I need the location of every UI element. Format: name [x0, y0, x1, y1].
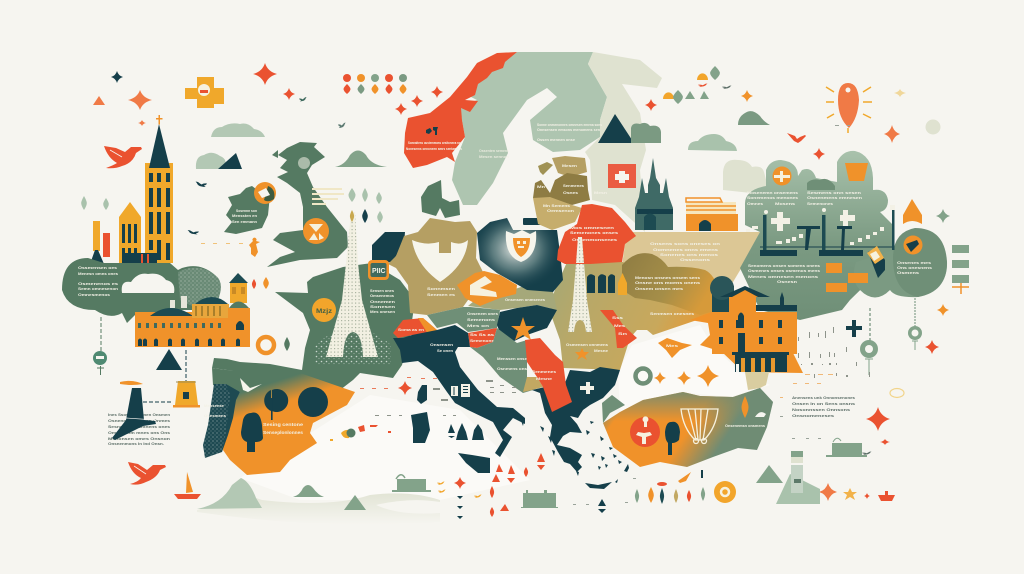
spain text [263, 422, 304, 435]
russia text lower: Osmenes onses osmenos mens [748, 269, 820, 273]
russia text lower [748, 264, 820, 284]
switzerland text: Soma as en [398, 328, 425, 332]
russia text top: Osnenmens emnesen [807, 196, 863, 200]
moldova text: Sss [612, 316, 623, 320]
country: great britain [267, 142, 348, 267]
leaves: near britain [81, 188, 383, 351]
country: lithuania [533, 197, 582, 230]
text block: bottom left: Osnenm Omenssn Onmes [108, 419, 170, 423]
portugal text: Mensense [204, 404, 224, 408]
map: british isles [224, 142, 348, 267]
badge: benelux [368, 260, 389, 280]
badge: ireland north [254, 182, 276, 204]
badge: right [904, 236, 922, 254]
map: north africa coast strip [197, 478, 440, 524]
spain icons [240, 378, 328, 452]
country: russia south coast orange [690, 312, 803, 373]
turkey text: Onsenemsn onsmens [725, 424, 765, 428]
small figure [249, 238, 260, 257]
dashed connector [143, 401, 172, 403]
country: greek thrace [602, 395, 625, 423]
country: tan coast [523, 377, 543, 392]
belarus text: Mos omnesnen [570, 226, 615, 230]
italy sign [451, 384, 470, 397]
serbia text [532, 370, 556, 381]
country: ireland [224, 186, 270, 234]
dash pins right [860, 298, 922, 375]
island: sicily [458, 453, 490, 473]
chimney bars [93, 221, 100, 251]
map: balkans [470, 237, 637, 489]
baltics text: Oemsenon [547, 209, 575, 213]
ring: pale right [890, 388, 904, 398]
country: crimea [658, 338, 692, 358]
badge: france [312, 298, 336, 322]
poland port block [523, 218, 550, 225]
baltics text: Mesn [594, 191, 608, 195]
finland text [537, 123, 602, 142]
region: dark bushes [710, 276, 734, 312]
country: bulgaria and greece [532, 367, 620, 472]
hills: bottom left [293, 485, 366, 510]
connector: left cloud pin [93, 317, 107, 375]
statues [170, 296, 187, 308]
ukraine cream text: Sonenes ons menos [660, 253, 718, 257]
slovenia text: Semenons [470, 339, 494, 343]
dark circle [298, 387, 328, 417]
country: ukraine cream [622, 232, 760, 320]
badge: england [303, 218, 329, 244]
text block: east sea: Onsnomeneses [792, 414, 834, 418]
shield: poland [506, 230, 536, 262]
norway text: Nonesmns onnoneen amrs sentamens [406, 147, 462, 151]
text block: east sea: Onsen In on Sens onsns [792, 402, 855, 406]
map: scandinavia [404, 52, 662, 232]
germany text: Sonnmsen [427, 287, 456, 291]
cloud text [78, 266, 119, 297]
dashes: mediterranean [330, 377, 456, 441]
map: baltic states and belarus [533, 156, 738, 264]
moldova text [612, 316, 628, 336]
france text: Sonesen [370, 305, 396, 309]
sparkles: red and orange markers [93, 63, 950, 501]
badge: cross [772, 166, 792, 186]
country: tan plain [550, 262, 715, 370]
colonnade [192, 304, 229, 318]
spire [149, 124, 170, 168]
icon: gear [714, 481, 736, 503]
baltics text: Mesen [562, 164, 578, 168]
country: czechia [457, 271, 517, 306]
island [272, 150, 278, 158]
moldova text: Sn [618, 332, 628, 336]
russia text top: Sonemenos menones [747, 196, 798, 200]
croatia text: Menssen onse [497, 357, 527, 361]
finland text: Ossen mennen onse [537, 138, 575, 142]
dashes: south [573, 125, 850, 505]
belarus text [570, 226, 618, 242]
aegean islands [520, 418, 629, 483]
russia text top: Mosens [775, 202, 795, 206]
eiffel tower: france [326, 212, 378, 357]
cloud text: Semn omnesenon [78, 287, 119, 291]
dark cloud bumps [807, 179, 835, 190]
text block: east sea [792, 396, 855, 418]
icon: white bump [755, 412, 766, 417]
ukraine brown text: Onsem onsen mes [635, 287, 683, 291]
croatia text [497, 357, 527, 371]
right cloud text [897, 261, 932, 275]
baltics text: Osnes [563, 191, 578, 195]
italy text [430, 343, 454, 353]
small birds [188, 84, 872, 455]
cloud [631, 123, 661, 143]
badge: red [630, 416, 660, 447]
icon: czech [470, 276, 497, 297]
circle: pale top right [926, 120, 940, 134]
spain text: Senseplonlonnes [263, 430, 304, 435]
plus: orange top [185, 77, 224, 108]
eiffel tower: romania [568, 237, 592, 332]
country: portugal [203, 384, 240, 458]
text block: bottom left: Ines Ssosnn Onsnen Onsmen [108, 413, 171, 417]
star: hungary [511, 317, 535, 340]
island: sardinia [411, 412, 430, 443]
cloud: mid left [196, 153, 226, 169]
icon: shield fan [681, 409, 718, 444]
austria text: Semenons [467, 318, 495, 322]
text block: bottom left: Sesnonm Oesmnens ones [108, 425, 170, 429]
right cloud text: Onsenes mes [897, 261, 931, 265]
map: western europe [203, 180, 487, 475]
bridge: skyline [746, 205, 895, 256]
towers [587, 274, 615, 293]
leaves: bottom row [635, 470, 705, 504]
country: estonia [552, 156, 587, 177]
cloud text: Osmenenos es [78, 282, 118, 286]
country: spain [212, 368, 355, 475]
slovakia text: Onsmsen onmsenes [505, 298, 545, 302]
ring: black sea [636, 368, 650, 384]
panel: green left cloud [62, 258, 221, 323]
country: denmark [421, 180, 460, 218]
norway marks [426, 127, 438, 135]
france text [370, 289, 396, 314]
trees: italy south [448, 423, 484, 440]
sweden text: Mesen sennon [479, 155, 510, 159]
norway text [406, 141, 462, 151]
building: palace left [135, 273, 250, 347]
bird: winged red [787, 133, 806, 143]
mountain: below palace [156, 349, 182, 370]
dash rows: east sea [780, 374, 833, 398]
baltics text: Mn Semens [543, 204, 570, 208]
mountain [218, 153, 242, 169]
russia text lower: Senomens onsen somens onens [748, 264, 820, 268]
island: corsica [417, 385, 427, 404]
cloud: top left [211, 123, 265, 137]
austria text: Mes on [467, 324, 490, 328]
moldova text: Mes [614, 324, 625, 328]
italy text: Onsensen [430, 343, 454, 347]
pin [908, 326, 922, 340]
scotland speckle [298, 157, 310, 169]
ireland text: Menssten en [232, 214, 258, 218]
norway text: Sonnaitens oustemmans cesitoneea nos [408, 141, 462, 145]
flag: switzerland [608, 164, 636, 188]
slovenia text: Ss Ss as [470, 333, 494, 337]
russia text top: Mosenemn onsemens [747, 191, 798, 195]
text block: bottom left [108, 413, 171, 446]
tower windows [149, 173, 170, 260]
uk text bars [312, 188, 344, 205]
russia text top: Omnes [747, 202, 763, 206]
cloud: far right [893, 228, 947, 297]
belarus text: Osnenmonsenes [572, 238, 617, 242]
monument [618, 273, 627, 295]
baltics text: Senmenes [563, 184, 584, 188]
map: turkey [603, 388, 773, 467]
tower [145, 163, 173, 263]
badge: france: Mzjz [316, 309, 332, 315]
sweden text: Ossenten semens [479, 149, 509, 153]
bird: spain [240, 378, 262, 392]
portugal text: Osesmens [204, 414, 226, 418]
mountain [598, 114, 634, 143]
building: cathedral [90, 115, 173, 264]
country: belarus [557, 204, 636, 264]
map: ukraine [550, 232, 803, 390]
right cloud text: Osmens [897, 271, 919, 275]
ukraine cream text: Ossenons [680, 258, 710, 262]
dome [150, 308, 193, 316]
ireland text: Sen emmann [232, 220, 258, 224]
country: hungary [497, 305, 557, 343]
country: norway [404, 52, 517, 168]
tower [230, 283, 247, 303]
sea: pale basins [240, 325, 770, 500]
country: italy [393, 325, 525, 457]
eiffel tower top: belarus [576, 237, 584, 263]
text block: bottom left: Omnesenm mnes ons Ons [108, 431, 170, 435]
windows [138, 323, 221, 328]
cloud: main body [740, 151, 893, 320]
dots: top row [343, 74, 407, 94]
dot grid: east sea [798, 327, 870, 378]
russia text top [747, 191, 863, 206]
cloud text: Omnesmenos [78, 293, 110, 297]
ukraine cream text [650, 242, 721, 262]
connector [869, 308, 871, 345]
stripes: right tags [952, 245, 969, 294]
germany text [427, 287, 456, 297]
castle: bottom [521, 490, 558, 508]
map: russia east [723, 151, 947, 320]
country: switzerland [393, 318, 437, 338]
cross: bulgaria [580, 382, 594, 394]
germany text: Senmen es [427, 293, 455, 297]
dark base [122, 253, 157, 264]
ukraine brown text: Onsne ons moens onens [635, 281, 700, 285]
ireland text: Sosennn son [236, 209, 258, 213]
map: italy and islands [393, 325, 525, 473]
markers: south mediterranean [437, 453, 606, 519]
romania text: Mesne [594, 349, 608, 353]
belarus text: Semenones onses [570, 231, 618, 235]
finland text: Onnsensen emsons menomens sen [537, 128, 601, 132]
ukraine cream text: Oomnenes onns emens [653, 248, 718, 252]
region: cream strait [745, 372, 769, 390]
italy text: Se onen [437, 349, 454, 353]
russia text top: Semenones [807, 202, 833, 206]
icons: top right row [663, 66, 720, 104]
plus: dark [846, 320, 862, 337]
france text: Sensen ones [370, 289, 394, 293]
tree [241, 412, 263, 452]
portugal text [204, 404, 226, 418]
pin [860, 340, 878, 358]
slovenia text [470, 333, 494, 343]
dashes: adriatic [433, 380, 516, 401]
ukraine cream text: Onsens sons oneses on [650, 242, 721, 246]
cloud: dome [335, 150, 387, 167]
baltics text [537, 164, 608, 213]
star: romania [575, 348, 589, 360]
dotted halo: france [315, 328, 391, 365]
text block: east sea: Anensens unk Onnonsenones [792, 396, 855, 400]
france text: Mes onesen [370, 310, 396, 314]
building: palace east [712, 286, 797, 372]
romania text [566, 343, 608, 353]
cathedral: east [635, 158, 673, 230]
building: arcade east [686, 198, 738, 231]
cloud: pale [723, 160, 770, 195]
russia text lower: Osnesn [777, 280, 798, 284]
island: crete [585, 482, 612, 489]
country: germany [388, 218, 487, 315]
country: croatia bosnia [470, 328, 533, 393]
russia text lower: Menes omnesen menons [748, 275, 818, 279]
cloud: small dark [738, 111, 770, 125]
country: ukraine brown blob [622, 253, 718, 315]
tree [272, 389, 288, 412]
text block: east sea: Nosonnssen Onnsons [792, 408, 850, 412]
anchor block left [392, 475, 431, 492]
map: central europe [393, 218, 563, 348]
icon: pen [867, 246, 885, 278]
croatia text: Osnmens ons [497, 367, 527, 371]
connector [914, 298, 916, 330]
cloud: right lobes [854, 231, 947, 298]
country: poland [477, 218, 563, 292]
bird: bottom left [128, 462, 166, 485]
finland text: Sonne onmenonnes omnesen emena sons [537, 123, 602, 127]
text block: bottom left: Msnonsen omes Onsnon [108, 437, 171, 441]
badge: benelux: PIIC [372, 268, 386, 275]
country: france [212, 263, 415, 390]
country: finland and sweden [452, 52, 607, 205]
country: slovenia [468, 328, 497, 348]
ireland text [232, 209, 258, 224]
crimea text: Mes [666, 344, 678, 348]
country: slovakia [468, 285, 557, 310]
country: latvia [533, 173, 590, 205]
lighthouse and mountains [756, 451, 820, 504]
austria text: Onsenem ones [467, 312, 498, 316]
spain text: Sesing centone [263, 422, 304, 427]
white cloud [122, 274, 174, 293]
cloud: top right [688, 134, 737, 151]
sweden text [479, 149, 510, 159]
icon: tree [665, 422, 680, 455]
island: saaremaa [538, 162, 553, 175]
ukraine brown text [635, 276, 700, 291]
russia text top: Sesmens onn sesen [807, 191, 862, 195]
icon: leaf [742, 396, 748, 418]
france text: Omsenemos [370, 294, 394, 298]
speckled blob [178, 268, 221, 310]
country: moldova [600, 310, 637, 348]
country: russia karelia [585, 52, 662, 232]
ukraine south text: Senmsen onesnes [650, 312, 694, 316]
serbia text: Mesne [536, 377, 552, 381]
serbia text: Senmenes [532, 370, 556, 374]
map pin [826, 83, 872, 133]
ring: left [258, 337, 274, 353]
chapel [119, 202, 141, 263]
text block: bottom left: Onsnenmons In Ind Onsn. [108, 442, 164, 446]
dash row [201, 243, 243, 244]
right cloud text: Ons onesnens [897, 266, 932, 270]
ukraine brown text: Menosn onsnes onsem sens [635, 276, 700, 280]
icon: pen and dark monument [112, 381, 156, 440]
cloud text: Menesn omns ones [78, 272, 118, 276]
country: serbia [525, 338, 572, 412]
icon: hut [173, 350, 200, 408]
cloud text: Ossmensen oes [78, 266, 117, 270]
country: austria [427, 307, 500, 332]
clouds: sky [196, 111, 770, 169]
bird: top left [104, 146, 142, 168]
tower: church orange [903, 199, 922, 224]
austria text [467, 312, 498, 328]
boat [174, 472, 201, 499]
anchor block [826, 438, 867, 457]
cross [156, 115, 162, 124]
icon: basket [845, 163, 868, 181]
france text: Onnemen [370, 300, 396, 304]
shield: germany [412, 240, 468, 282]
baltics text: Mn [537, 185, 546, 189]
country: netherlands belgium [372, 232, 405, 264]
romania text: Osmensen onnmens [566, 343, 608, 347]
orange block tags [826, 263, 868, 292]
